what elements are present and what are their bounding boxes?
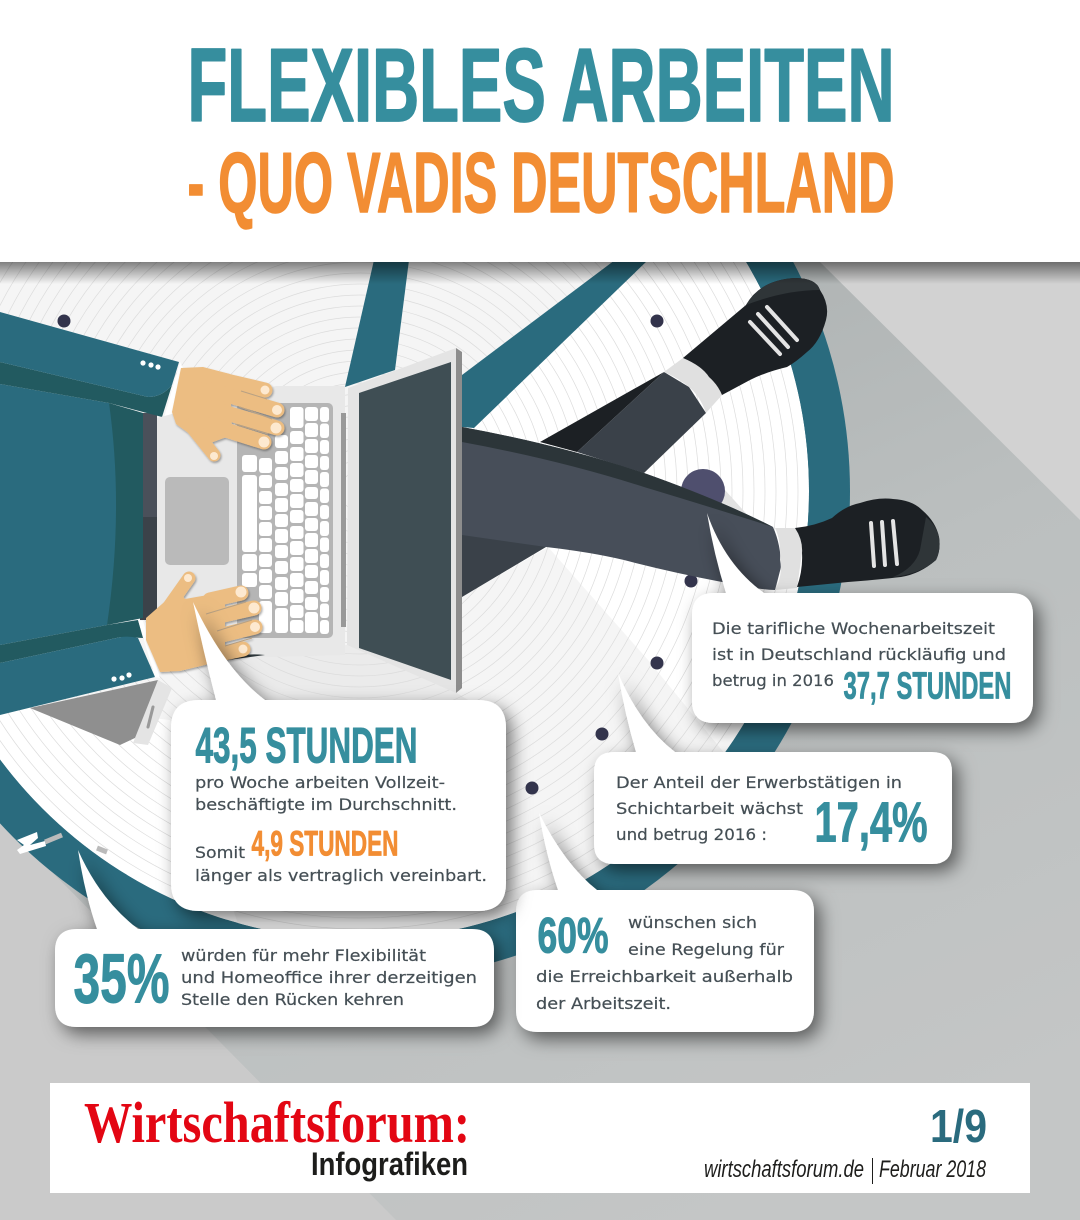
- callout: 60%: 60%: [538, 908, 608, 964]
- callout: 35%: und Homeoffice ihrer derzeitigen: [181, 968, 477, 987]
- callout: 60%: eine Regelung für: [628, 940, 784, 959]
- callout: 35%: würden für mehr Flexibilität: [181, 946, 426, 965]
- callout: 17,4%: [594, 673, 952, 864]
- callout: 37,7 Stunden: ist in Deutschland rückläufig und: [712, 645, 1006, 664]
- callout: 35%: [55, 850, 494, 1027]
- person torso: [0, 384, 157, 645]
- callout: 43,5 Stunden: [171, 602, 506, 911]
- callout: 17,4%: und betrug 2016 :: [616, 825, 767, 844]
- callout: 37,7 Stunden: Die tarifliche Wochenarbeitszeit: [712, 619, 995, 638]
- callout: 43,5 Stunden: Somit: [195, 843, 245, 862]
- footer: [50, 1083, 1030, 1193]
- footer subtitle: Infografiken: [311, 1146, 468, 1182]
- callout: 17,4%: Schichtarbeit wächst: [616, 799, 803, 818]
- callout: 37,7 Stunden: [692, 513, 1033, 723]
- callout: 17,4%: Der Anteil der Erwerbstätigen in: [616, 773, 902, 792]
- chair spokes: [345, 260, 648, 428]
- callout: 60%: [516, 813, 814, 1032]
- footer logo: Wirtschaftsforum:: [84, 1090, 470, 1155]
- white disc with concentric lines: [0, 262, 809, 929]
- teal chair ring: [0, 1, 850, 981]
- title: [188, 28, 894, 231]
- callout: 43,5 Stunden: pro Woche arbeiten Vollzeit-: [195, 773, 445, 792]
- back leg: [462, 278, 827, 597]
- lower hand: [146, 574, 260, 672]
- dots: [58, 314, 698, 794]
- chair knob: [681, 469, 770, 560]
- callout: 35%: 35%: [74, 940, 170, 1018]
- source line: Februar 2018: [879, 1156, 986, 1183]
- callout: 43,5 Stunden: länger als vertraglich vereinbart.: [195, 866, 487, 885]
- top edge shadow: [0, 262, 1080, 284]
- page number: 1/9: [930, 1100, 987, 1152]
- laptop screen: [347, 348, 462, 693]
- header background: [0, 0, 1080, 262]
- lower arm: [0, 620, 160, 715]
- callout: 60%: der Arbeitszeit.: [536, 994, 671, 1013]
- trackpad: [165, 477, 229, 565]
- callout: 35%: Stelle den Rücken kehren: [181, 990, 404, 1009]
- callout: 43,5 Stunden: beschäftigte im Durchschnitt.: [195, 795, 457, 814]
- source line: wirtschaftsforum.de: [704, 1156, 864, 1183]
- chair base and small parts: [17, 680, 172, 854]
- upper arm: [0, 312, 183, 419]
- callout: 17,4%: 17,4%: [814, 790, 928, 854]
- callout: 43,5 Stunden: 4,9 STUNDEN: [252, 824, 398, 864]
- callout: 60%: die Erreichbarkeit außerhalb: [536, 967, 793, 986]
- callout: 60%: wünschen sich: [628, 913, 757, 932]
- callout: 43,5 Stunden: 43,5 STUNDEN: [196, 718, 418, 774]
- keyboard: [237, 403, 333, 638]
- callout: 37,7 Stunden: betrug in 2016: [712, 671, 834, 690]
- front leg: [462, 427, 940, 590]
- upper hand: [172, 367, 282, 460]
- background panel: [0, 262, 1080, 1220]
- laptop base: [157, 386, 346, 660]
